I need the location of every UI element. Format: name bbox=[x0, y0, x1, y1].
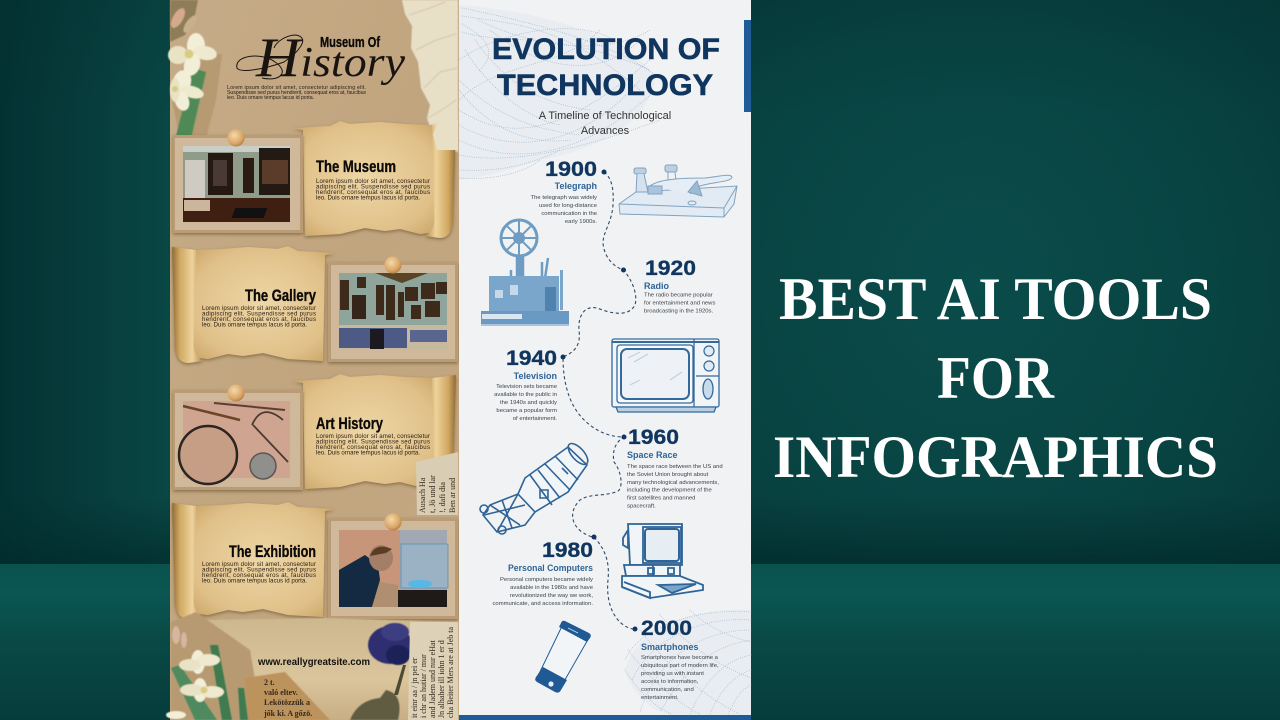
dotted wave tone bottom bbox=[625, 610, 751, 715]
card: art history bbox=[173, 374, 456, 491]
subtitle: Advances bbox=[581, 125, 630, 137]
card text bbox=[202, 561, 316, 584]
light background bbox=[459, 0, 751, 720]
card text: hendrerit, consequat eros at, faucibus bbox=[202, 316, 316, 323]
intro text: Suspendisse sed purus hendrerit, consequat eros at, faucibus bbox=[227, 90, 366, 96]
milestone 2000: providing us with instant bbox=[641, 671, 704, 677]
milestone 1940: the 1940s and quickly bbox=[500, 400, 557, 406]
newspaper scrap bottom left bbox=[171, 612, 262, 720]
torn paper top right bbox=[402, 0, 458, 152]
accent bar right bbox=[744, 20, 751, 112]
accent bar bottom bbox=[459, 715, 751, 720]
newspaper scrap mid right bbox=[416, 452, 458, 515]
frame bbox=[173, 135, 303, 233]
milestone 1900: 1900 bbox=[545, 158, 597, 181]
purple flower bbox=[368, 623, 412, 665]
milestone 1940: 1940 bbox=[506, 347, 557, 370]
newspaper scrap bottom right: Jn alhaher ill iohn 1 er d bbox=[437, 640, 446, 718]
flowers top left bbox=[168, 0, 218, 113]
headline: INFOGRAPHICS bbox=[773, 424, 1218, 490]
milestone 1900: communication in the bbox=[541, 211, 598, 217]
milestone 1900: early 1900s. bbox=[565, 219, 597, 225]
newspaper scrap with text: Lekötözzük a bbox=[264, 698, 310, 707]
pin bbox=[384, 514, 402, 530]
newspaper scrap with text bbox=[245, 672, 330, 720]
background wall left bbox=[0, 0, 170, 564]
card text bbox=[316, 433, 430, 456]
panel: museum of history bbox=[166, 0, 459, 720]
card text: adipiscing elit. Suspendisse sed purus bbox=[316, 184, 430, 190]
intro text bbox=[227, 85, 366, 101]
card text: Lorem ipsum dolor sit amet, consectetur bbox=[316, 178, 430, 185]
milestone 1980: revolutionized the way we work, bbox=[510, 593, 593, 599]
milestone 1940: available to the public in bbox=[494, 392, 557, 398]
card text: Lorem ipsum dolor sit amet, consectetur bbox=[202, 305, 316, 312]
milestone 1900 bbox=[531, 158, 598, 225]
dark leaf bbox=[350, 690, 400, 720]
main title bbox=[492, 33, 720, 102]
newspaper scrap with text: való eltev. bbox=[264, 688, 298, 697]
newspaper scrap bottom right: i chr an hutiar / mur bbox=[419, 654, 428, 718]
card text: adipiscing elit. Suspendisse sed purus bbox=[202, 310, 316, 318]
photo: art tools bbox=[179, 401, 290, 484]
scroll bbox=[293, 374, 456, 491]
milestone 1900: The telegraph was widely bbox=[531, 195, 597, 201]
subtitle bbox=[539, 110, 671, 137]
milestone 1900: used for long-distance bbox=[539, 203, 598, 209]
milestone 2000 bbox=[641, 617, 719, 701]
headline bbox=[773, 266, 1218, 490]
milestone 1920: 1920 bbox=[645, 257, 696, 280]
milestone 1940: became a popular form bbox=[496, 408, 557, 414]
card: the gallery bbox=[172, 246, 458, 363]
headline: BEST AI TOOLS bbox=[779, 266, 1212, 332]
milestone 2000: Smartphones have become a bbox=[641, 655, 719, 661]
card title: Art History bbox=[316, 414, 383, 433]
milestone 1900: Telegraph bbox=[555, 181, 597, 191]
milestone 1980: available in the 1980s and have bbox=[510, 585, 594, 591]
milestone 1980 bbox=[492, 539, 594, 607]
scroll bbox=[172, 246, 335, 363]
icon: personal computer bbox=[622, 524, 703, 598]
card text: hendrerit, consequat eros at, faucibus bbox=[316, 189, 430, 196]
milestone 1940: Television bbox=[514, 371, 557, 381]
frame bbox=[328, 262, 458, 362]
milestone 2000: communication, and bbox=[641, 687, 694, 693]
newspaper scrap bottom right bbox=[408, 622, 458, 720]
milestone 1960: the Soviet Union brought about bbox=[627, 472, 709, 478]
newspaper scrap mid right: Ausach Ha bbox=[418, 477, 427, 513]
milestone 1960: Space Race bbox=[627, 450, 678, 460]
newspaper scrap mid right: Ben ar und bbox=[448, 478, 457, 513]
card text: leo. Duis ornare tempus lacus id porta. bbox=[316, 450, 420, 456]
card text: hendrerit, consequat eros at, faucibus bbox=[316, 444, 430, 451]
newspaper scrap top left bbox=[172, 45, 222, 142]
dotted wave tone top bbox=[459, 5, 655, 180]
scroll bbox=[172, 502, 335, 619]
photo: museum room bbox=[183, 146, 290, 222]
frame bbox=[173, 390, 303, 490]
background floor bbox=[0, 564, 1280, 720]
card title: The Exhibition bbox=[229, 542, 316, 561]
card text bbox=[202, 305, 316, 328]
photo: visitor at display case bbox=[339, 530, 448, 607]
website: www.reallygreatsite.com bbox=[257, 657, 370, 668]
background wall right bbox=[750, 0, 1280, 564]
card: the exhibition bbox=[172, 502, 458, 619]
newspaper scrap mid right: !, dafi dia bbox=[438, 482, 447, 513]
panel: evolution of technology bbox=[459, 0, 751, 720]
milestone 1920: broadcasting in the 1920s. bbox=[644, 308, 713, 314]
stem bbox=[394, 665, 406, 695]
card text: Lorem ipsum dolor sit amet, consectetur bbox=[316, 433, 430, 440]
timeline path bbox=[560, 170, 638, 632]
icon: smartphone bbox=[535, 621, 591, 693]
main title: EVOLUTION OF bbox=[492, 33, 720, 66]
kraft paper background bbox=[170, 0, 459, 720]
card text: leo. Duis ornare tempus lacus id porta. bbox=[202, 322, 307, 328]
pin bbox=[228, 130, 244, 146]
newspaper scrap bottom right: it einr aa / jn pei er bbox=[410, 657, 419, 718]
milestone 1940: Television sets became bbox=[496, 384, 558, 390]
card title: The Museum bbox=[316, 157, 396, 176]
milestone 1920: for entertainment and news bbox=[644, 300, 715, 306]
pin bbox=[384, 256, 402, 274]
card text: adipiscing elit. Suspendisse sed purus bbox=[202, 566, 316, 574]
pin bbox=[228, 384, 244, 402]
milestone 1960: first satellites and manned bbox=[627, 496, 695, 502]
card text: Lorem ipsum dolor sit amet, consectetur bbox=[202, 561, 316, 568]
milestone 1960: 1960 bbox=[628, 426, 679, 449]
light paper bbox=[205, 618, 458, 720]
scroll bbox=[293, 121, 456, 238]
milestone 2000: ubiquitous part of modern life, bbox=[641, 663, 719, 669]
milestone 1980: Personal Computers bbox=[508, 563, 593, 573]
milestone 2000: entertainment. bbox=[641, 695, 679, 701]
card title: The Gallery bbox=[245, 286, 316, 305]
torn paper overlap bbox=[433, 120, 458, 150]
milestone 1940 bbox=[494, 347, 558, 422]
milestone 1940: of entertainment. bbox=[513, 416, 557, 422]
card text: adipiscing elit. Suspendisse sed purus bbox=[316, 438, 430, 446]
intro text: Lorem ipsum dolor sit amet, consectetur adipiscing elit. bbox=[227, 85, 366, 91]
newspaper scrap with text: 2 t. bbox=[264, 678, 275, 687]
heading: history script: History bbox=[255, 27, 405, 89]
newspaper scrap mid right: t, Jö und lar bbox=[428, 475, 437, 513]
milestone 1960: including the development of the bbox=[627, 488, 713, 494]
icon: telegraph key bbox=[619, 165, 737, 217]
milestone 1960 bbox=[627, 426, 723, 510]
icon: television bbox=[612, 339, 719, 412]
milestone 2000: access to information, bbox=[641, 679, 699, 685]
icon: space capsule bbox=[480, 440, 591, 534]
bottom collage bbox=[166, 612, 458, 720]
milestone 2000: Smartphones bbox=[641, 642, 699, 652]
main title: TECHNOLOGY bbox=[497, 69, 713, 102]
flowers bottom left bbox=[166, 626, 248, 720]
headline: FOR bbox=[937, 345, 1055, 411]
card text bbox=[316, 178, 430, 202]
milestone 1980: Personal computers became widely bbox=[500, 577, 593, 583]
newspaper scrap bottom right: and Jadem und nur eHat bbox=[428, 639, 437, 718]
subtitle: A Timeline of Technological bbox=[539, 110, 671, 122]
dotted wave bottom bbox=[625, 610, 751, 714]
card text: leo. Duis ornare tempus lacus id porta. bbox=[316, 194, 420, 202]
dotted wave top bbox=[459, 8, 660, 178]
milestone 1960: many technological advancements, bbox=[627, 480, 719, 486]
newspaper scrap with text: jők ki. A gőzö. bbox=[263, 709, 312, 718]
wall shading bbox=[0, 0, 1280, 564]
milestone 1960: The space race between the US and bbox=[627, 464, 723, 470]
photo: gallery room bbox=[339, 273, 447, 350]
milestone 1920: The radio became popular bbox=[644, 292, 713, 298]
card text: hendrerit, consequat eros at, faucibus bbox=[202, 572, 316, 579]
flower stem top left bbox=[176, 68, 206, 139]
newspaper scrap bottom right: cha Beiter Mers are at Jeb ta bbox=[446, 626, 455, 718]
milestone 1920 bbox=[644, 257, 715, 314]
heading: museum of: Museum Of bbox=[320, 34, 381, 51]
card: the museum bbox=[173, 120, 458, 238]
milestone 1980: communicate, and access information. bbox=[492, 601, 593, 607]
milestone 1920: Radio bbox=[644, 281, 670, 291]
frame bbox=[328, 518, 458, 619]
milestone 1960: spacecraft. bbox=[627, 504, 656, 510]
milestone 2000: 2000 bbox=[641, 617, 692, 640]
card text: leo. Duis ornare tempus lacus id porta. bbox=[202, 578, 307, 584]
intro text: leo. Duis ornare tempus lacus id porta. bbox=[227, 95, 314, 101]
milestone 1980: 1980 bbox=[542, 539, 593, 562]
icon: film projector machine bbox=[481, 220, 569, 326]
